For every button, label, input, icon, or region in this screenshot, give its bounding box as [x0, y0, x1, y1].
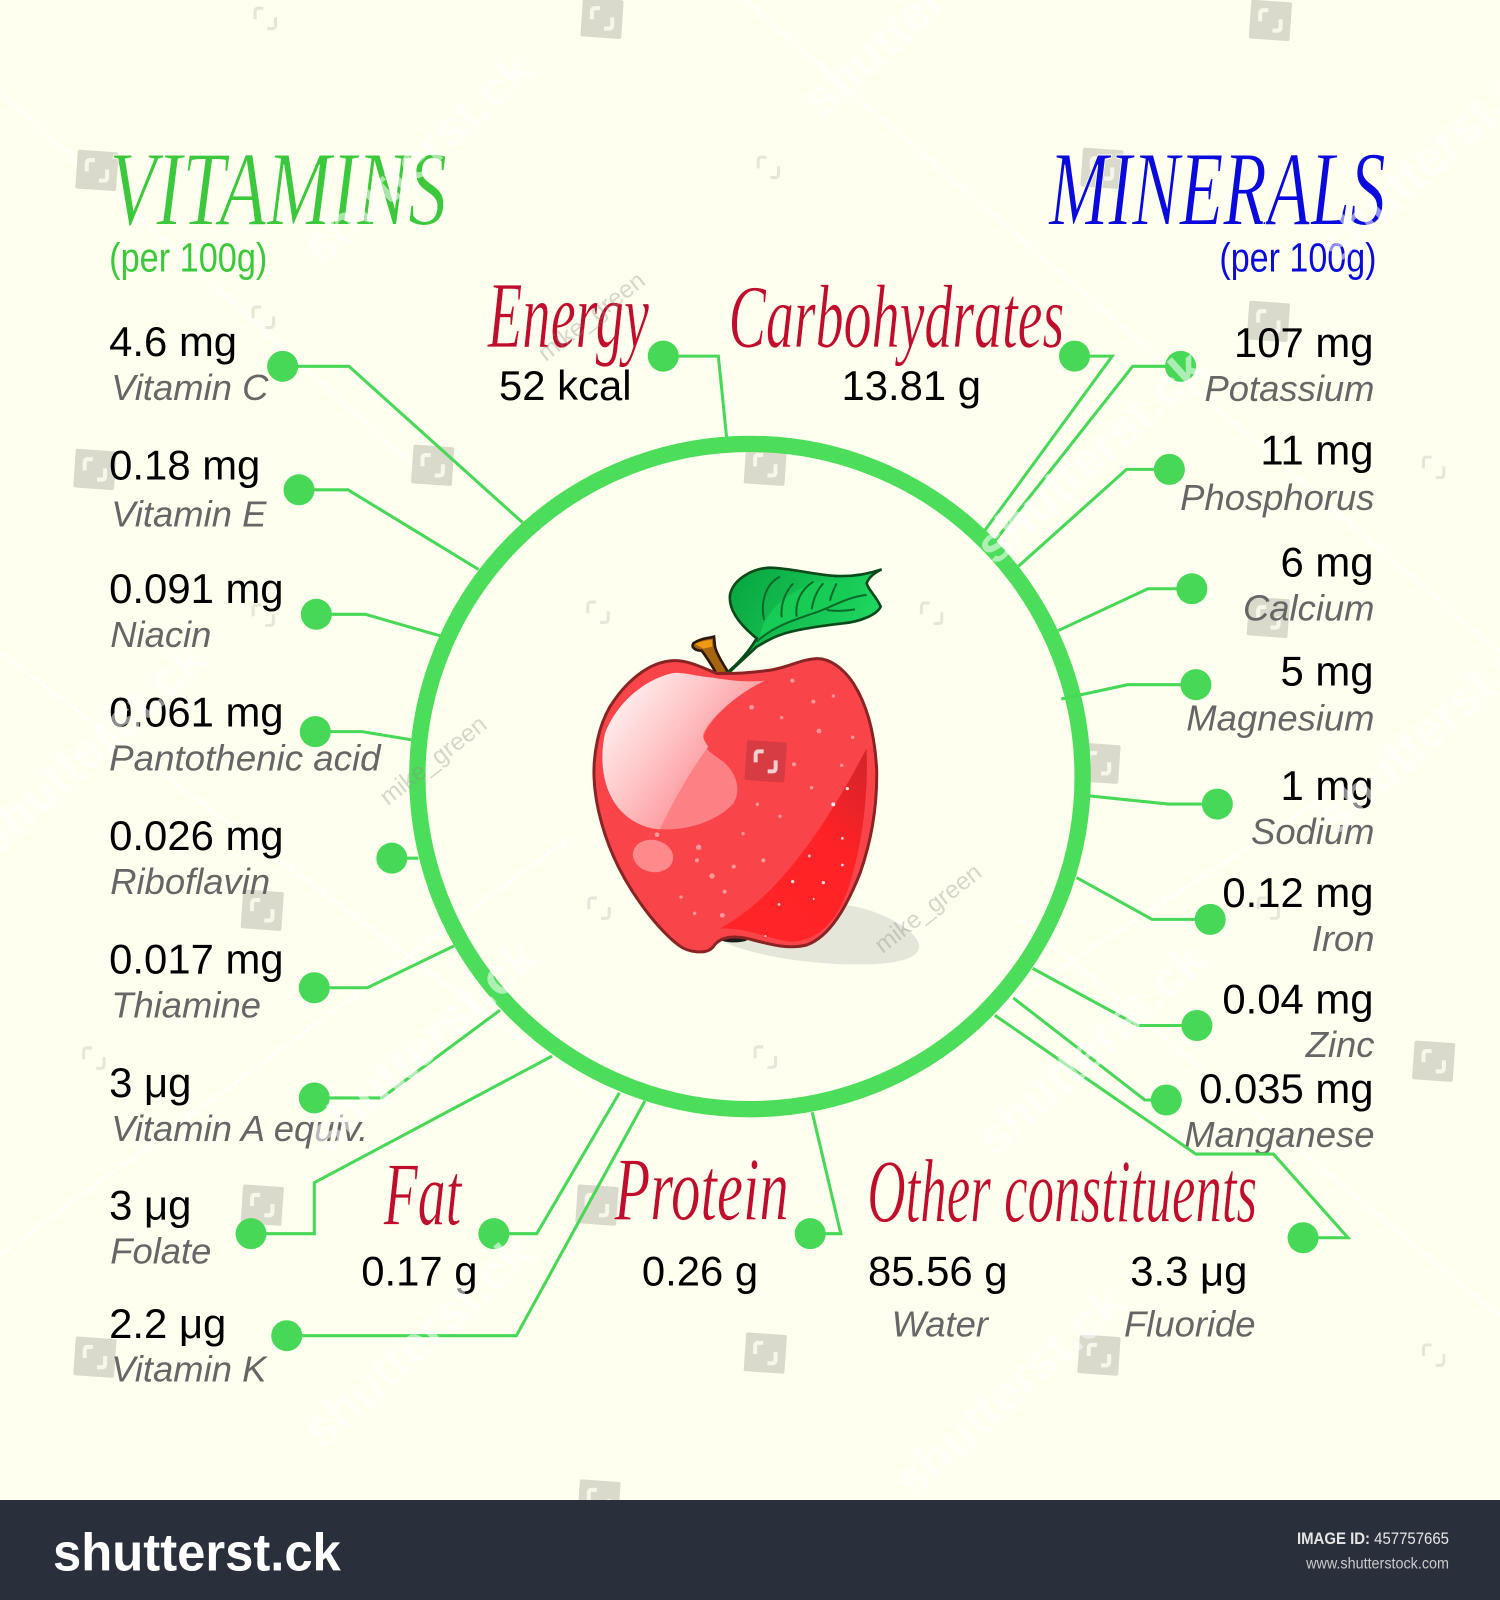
riboflavin — [109, 812, 418, 902]
image id: IMAGE ID: 457757665 — [1297, 1530, 1449, 1548]
iron: 0.12 mg — [1222, 869, 1373, 916]
sodium: 1 mg — [1280, 762, 1373, 809]
protein: 0.26 g — [642, 1248, 758, 1295]
vitamin c: Vitamin C — [111, 367, 269, 408]
pantothenic acid: Pantothenic acid — [109, 737, 382, 778]
niacin: Niacin — [110, 614, 211, 655]
riboflavin: Riboflavin — [110, 861, 270, 902]
magnesium: Magnesium — [1186, 698, 1374, 739]
folate: 3 μg — [109, 1181, 191, 1228]
vitamin a: 3 μg — [109, 1059, 191, 1106]
magnesium — [1061, 648, 1374, 739]
carbohydrates: 13.81 g — [841, 362, 981, 409]
pantothenic acid: 0.061 mg — [109, 689, 284, 736]
iron: Iron — [1312, 918, 1374, 959]
watermark credit: mike_green — [533, 267, 650, 367]
heading: vitamins: (per 100g) — [109, 234, 267, 280]
potassium: 107 mg — [1234, 319, 1373, 366]
carbohydrates — [729, 268, 1112, 531]
other constituents: Fluoride — [1124, 1304, 1256, 1345]
other constituents: Water — [892, 1304, 990, 1345]
central ring — [417, 444, 1083, 1109]
calcium: 6 mg — [1280, 539, 1373, 586]
watermark overlay: shutterst.ck — [882, 1272, 1136, 1508]
logo: shutterst.ck — [53, 1523, 341, 1582]
folate — [109, 1056, 552, 1271]
vitamin k: Vitamin K — [111, 1349, 268, 1390]
vitamin e: 0.18 mg — [109, 442, 260, 489]
website: www.shutterstock.com — [1305, 1555, 1449, 1572]
manganese: 0.035 mg — [1199, 1065, 1373, 1112]
watermark overlay: shutterst.ck — [296, 927, 549, 1163]
manganese: Manganese — [1184, 1114, 1374, 1155]
heading: minerals — [1048, 129, 1386, 280]
other constituents: 85.56 g — [868, 1248, 1008, 1295]
fat: 0.17 g — [361, 1248, 478, 1295]
heading: vitamins — [109, 129, 447, 280]
thiamine — [109, 935, 454, 1025]
watermark overlay: shutterst.ck — [964, 930, 1218, 1166]
sodium — [1090, 762, 1374, 852]
mineral rows — [995, 319, 1374, 1155]
potassium: Potassium — [1205, 368, 1374, 409]
manganese — [1013, 998, 1374, 1155]
protein: Protein — [614, 1140, 789, 1239]
watermark overlay: shutterst.ck — [291, 39, 544, 276]
sodium: Sodium — [1251, 811, 1374, 852]
vitamin rows — [109, 318, 645, 1390]
vitamin k — [109, 1101, 645, 1390]
phosphorus: Phosphorus — [1180, 477, 1374, 518]
niacin: 0.091 mg — [109, 565, 284, 612]
energy — [487, 264, 727, 437]
magnesium: 5 mg — [1280, 648, 1373, 695]
heading: vitamins: VITAMINS — [109, 129, 447, 247]
watermark credit: mike_green — [870, 859, 987, 959]
zinc — [1033, 968, 1374, 1065]
heading: minerals: (per 100g) — [1219, 234, 1377, 280]
zinc: Zinc — [1305, 1024, 1374, 1065]
zinc: 0.04 mg — [1222, 975, 1373, 1022]
other constituents: 3.3 μg — [1130, 1248, 1247, 1295]
vitamin k: 2.2 μg — [109, 1300, 226, 1347]
vitamin a: Vitamin A equiv. — [111, 1108, 368, 1149]
energy: 52 kcal — [499, 362, 632, 409]
vitamin e: Vitamin E — [111, 494, 267, 535]
phosphorus: 11 mg — [1260, 426, 1373, 473]
vitamin e — [109, 442, 479, 569]
watermark overlay: shutterst.ck — [291, 1223, 544, 1459]
calcium: Calcium — [1243, 587, 1374, 628]
footer bar — [0, 1500, 1500, 1600]
calcium — [1058, 539, 1374, 631]
icon: apple — [594, 568, 919, 964]
watermark credit — [375, 267, 987, 959]
niacin — [109, 565, 440, 655]
phosphorus — [1018, 426, 1374, 566]
watermark overlay: shutterst.ck — [964, 338, 1218, 575]
thiamine: 0.017 mg — [109, 935, 284, 982]
thiamine: Thiamine — [111, 984, 261, 1025]
pantothenic acid — [109, 689, 411, 778]
folate: Folate — [110, 1230, 211, 1271]
protein — [614, 1112, 841, 1295]
potassium — [995, 319, 1374, 541]
fat: Fat — [383, 1145, 462, 1244]
vitamin c — [109, 318, 522, 522]
riboflavin: 0.026 mg — [109, 812, 284, 859]
fat — [361, 1093, 619, 1295]
other constituents — [867, 1015, 1348, 1345]
vitamin c: 4.6 mg — [109, 318, 237, 365]
iron — [1077, 869, 1374, 959]
carbohydrates: Carbohydrates — [729, 268, 1064, 367]
energy: Energy — [487, 264, 649, 368]
watermark credit: mike_green — [375, 711, 492, 811]
vitamin a — [109, 1010, 500, 1149]
